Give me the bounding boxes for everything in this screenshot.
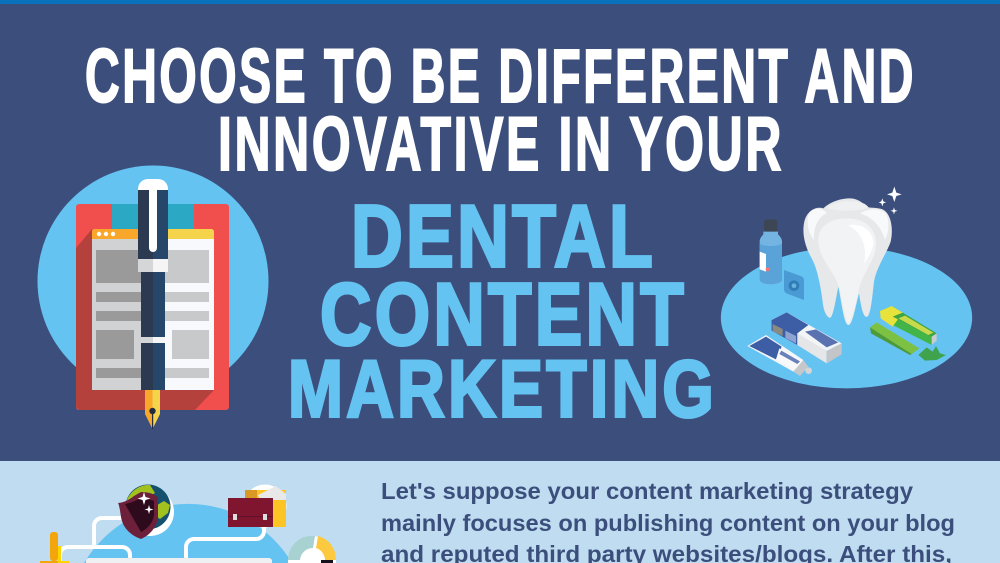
icon: clipboard and fountain pen [38, 166, 268, 429]
title: blue heading lines: CONTENT [320, 264, 687, 364]
icon: globe and shield [118, 484, 174, 539]
central blue circle [84, 504, 292, 563]
toothpaste tube [747, 335, 812, 376]
connector lines [60, 518, 264, 563]
document page [92, 229, 214, 390]
title: blue heading lines: DENTAL [351, 186, 656, 286]
tooth [803, 198, 892, 325]
icon: tooth with dental products [721, 187, 972, 388]
clipboard board [76, 204, 229, 410]
dental floss box [784, 270, 804, 300]
illustration: connected business icons [40, 484, 336, 563]
body text paragraph: Let's suppose your content marketing strategy [381, 478, 913, 504]
fountain pen [138, 179, 168, 429]
toothpaste box [772, 312, 842, 363]
clipboard clip [112, 204, 194, 230]
icon: trophy column [40, 532, 69, 563]
title: blue heading lines: MARKETING [288, 344, 717, 434]
mint leaves [918, 346, 946, 361]
icon: briefcase and folder [228, 484, 286, 528]
mouthwash bottle [760, 219, 782, 284]
icon: donut chart [288, 536, 336, 563]
top accent bar [0, 0, 1000, 4]
title: white heading lines [85, 34, 916, 187]
lower section background [0, 461, 1000, 563]
body text paragraph [381, 478, 955, 563]
title: blue heading lines [288, 186, 717, 434]
gum stick [870, 322, 919, 355]
sparkles [879, 187, 902, 214]
white content panel [86, 558, 272, 563]
chewing gum pack [880, 306, 937, 345]
product platform ellipse [721, 247, 972, 388]
icon backdrop circle [38, 166, 268, 396]
body text paragraph: mainly focuses on publishing content on your blog [381, 510, 955, 536]
